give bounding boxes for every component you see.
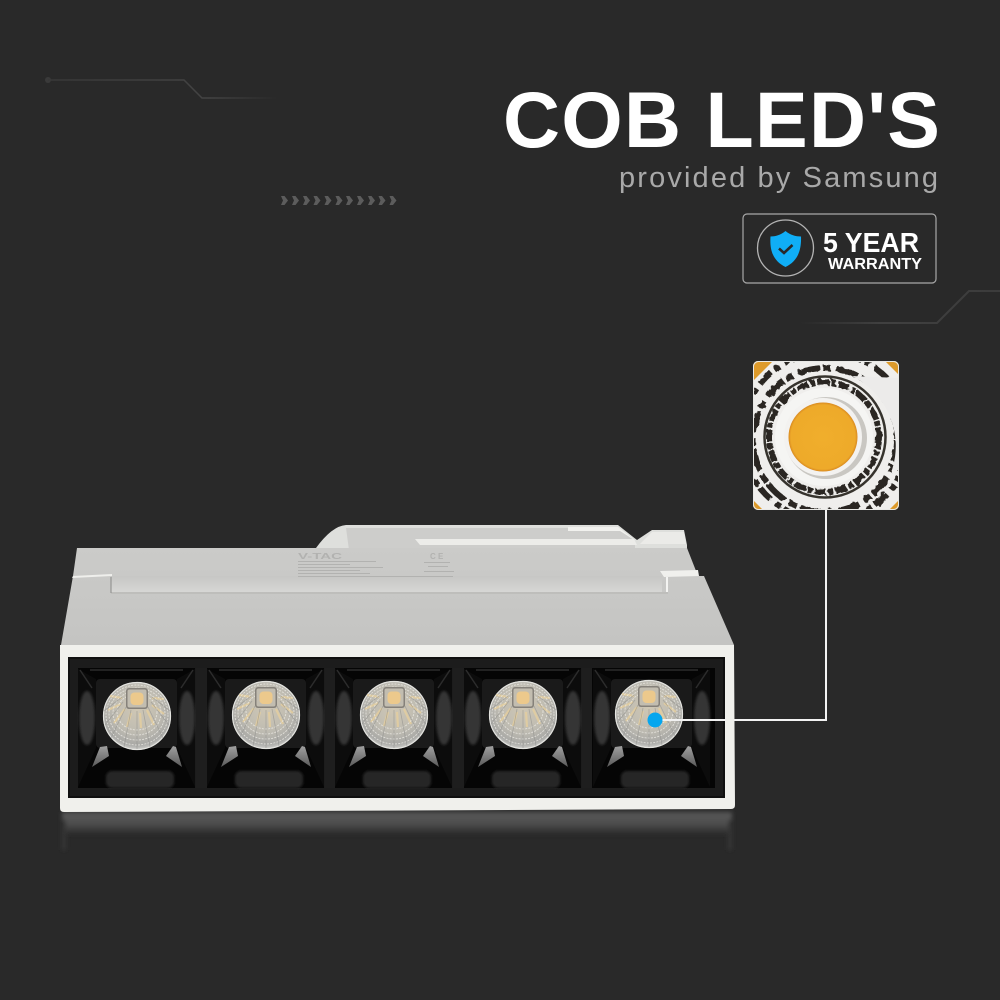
LED reflector 5 bbox=[615, 680, 683, 748]
cell divider 2 bbox=[325, 668, 336, 788]
COB amber disc bbox=[788, 402, 858, 472]
track adapter bbox=[316, 525, 687, 552]
connector line from LED to inset bbox=[655, 510, 826, 720]
product label print bbox=[298, 552, 454, 577]
cell divider 3 bbox=[453, 668, 464, 788]
icon: warranty shield bbox=[758, 220, 814, 276]
decorative circuit line right bbox=[800, 291, 1000, 323]
LED cell 3 bbox=[335, 668, 452, 788]
inset: COB LED close-up bbox=[753, 361, 899, 510]
raised step bbox=[111, 576, 662, 592]
LED reflector 2 bbox=[232, 681, 300, 749]
cell divider 1 bbox=[196, 668, 207, 788]
LED reflector 4 bbox=[489, 681, 557, 749]
inset frame bbox=[754, 362, 898, 510]
LED cell 4 bbox=[464, 668, 581, 788]
LED cell 1 bbox=[78, 668, 195, 788]
top panel bbox=[61, 548, 734, 645]
product label print: C E bbox=[430, 552, 444, 561]
decorative chevrons bbox=[281, 196, 396, 205]
product label print: V-TAC bbox=[298, 552, 342, 561]
black fascia bbox=[68, 657, 725, 798]
product: track light bbox=[60, 525, 735, 812]
title: COB LED'S bbox=[503, 75, 940, 164]
subtitle: provided by Samsung bbox=[619, 162, 938, 194]
connector segment over LED bbox=[655, 719, 726, 721]
warranty years: 5 YEAR bbox=[823, 227, 919, 258]
LED reflector 3 bbox=[360, 681, 428, 749]
warranty label: WARRANTY bbox=[828, 256, 922, 273]
LED cell 2 bbox=[207, 668, 324, 788]
cell divider 4 bbox=[582, 668, 592, 788]
floor reflection bbox=[62, 812, 732, 850]
blue marker dot bbox=[648, 712, 662, 728]
decorative circuit line top left bbox=[45, 77, 278, 98]
warranty badge bbox=[743, 214, 936, 283]
LED cell 5 bbox=[592, 668, 715, 788]
white front face bbox=[60, 645, 735, 812]
LED reflector 1 bbox=[103, 682, 171, 750]
